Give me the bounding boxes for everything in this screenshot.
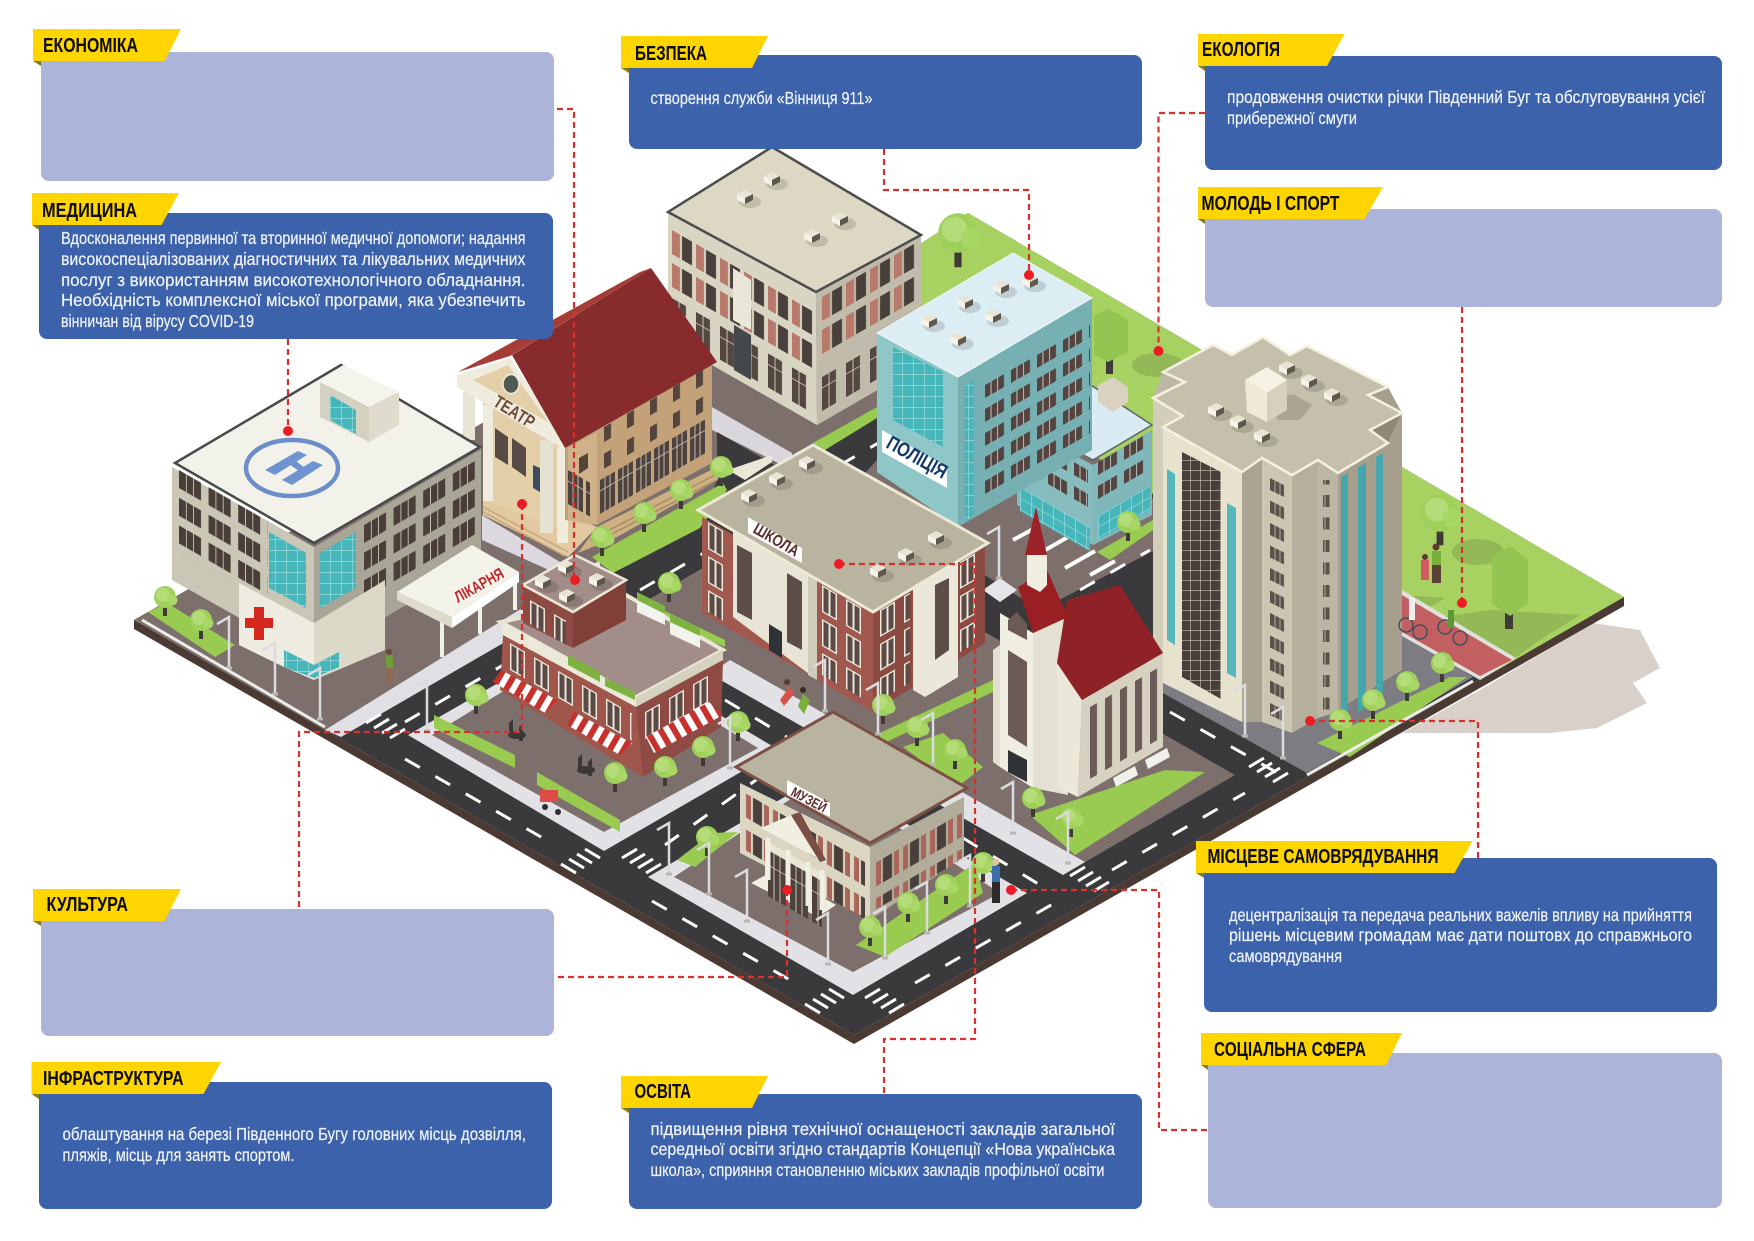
- panel: інфраструктура: [32, 1062, 552, 1209]
- body text: школа», сприяння становленню міських закладів профільної освіти: [650, 1160, 1104, 1180]
- sidewalk along school: [710, 660, 1085, 875]
- sign: hospital: ЛІКАРНЯ: [452, 565, 507, 606]
- sidewalk along hospital block: [325, 560, 600, 737]
- sidewalk under beige office: [712, 407, 792, 470]
- museum plaza: [674, 778, 1000, 972]
- body text: продовження очистки річки Південний Буг та обслуговування усієї: [1227, 87, 1705, 107]
- body text: [1227, 87, 1705, 128]
- trees: [154, 456, 1461, 946]
- block: hospital and theatre plaza: [134, 270, 880, 730]
- icon: large tree behind police: [938, 213, 980, 267]
- panel: соціальна сфера: [1201, 1033, 1722, 1208]
- sign: museum: МУЗЕЙ: [789, 783, 830, 815]
- base edge highlights: [142, 620, 1473, 775]
- heading: ІНФРАСТРУКТУРА: [43, 1068, 184, 1090]
- heading: БЕЗПЕКА: [635, 43, 707, 65]
- panel: місцеве самоврядування: [1196, 841, 1717, 1012]
- side road by theatre: [700, 432, 792, 528]
- building: beige office: [668, 147, 921, 425]
- block: police plaza: [850, 360, 1155, 610]
- base slab thickness: [134, 597, 1624, 1044]
- block: tower plaza: [1150, 560, 1473, 773]
- connector dots: [283, 270, 1467, 895]
- building: school: [698, 445, 988, 712]
- canopy: [397, 545, 519, 657]
- heading: КУЛЬТУРА: [46, 894, 128, 916]
- bicycle lane: [1402, 590, 1516, 680]
- body text: рішень місцевим громадам має дати поштовх до справжнього: [1229, 925, 1692, 945]
- lawns and hedges: [148, 407, 1467, 957]
- body text: облаштування на березі Південного Бугу головних місць дозвілля,: [62, 1124, 526, 1144]
- panel: освіта: [621, 1076, 1142, 1209]
- asphalt ground: [134, 213, 1624, 1035]
- panel: економіка: [33, 29, 554, 181]
- green park ground: [880, 213, 1624, 680]
- body text: створення служби «Вінниця 911»: [650, 88, 873, 108]
- people: [386, 544, 1467, 903]
- body text: Необхідність комплексної міської програми, яка убезпечить: [61, 290, 526, 310]
- sidewalk square near police: [983, 578, 1017, 602]
- building: cafe: [493, 555, 723, 777]
- benches: [1113, 748, 1170, 787]
- sign: school: ШКОЛА: [750, 521, 802, 561]
- body text: самоврядування: [1229, 946, 1342, 966]
- heading: МОЛОДЬ І СПОРТ: [1202, 193, 1340, 215]
- cafe tables: [508, 719, 595, 776]
- panel: культура: [33, 889, 554, 1036]
- body text: послуг з використанням високотехнологічного обладнання.: [61, 270, 526, 290]
- sign: theatre: ТЕАТР: [490, 391, 539, 432]
- cast shadow: [1402, 623, 1660, 733]
- heading: МЕДИЦИНА: [42, 200, 137, 222]
- heading: ЕКОЛОГІЯ: [1202, 39, 1280, 61]
- building: tower: [1153, 337, 1402, 734]
- building: hospital: [172, 365, 519, 680]
- heading: СОЦІАЛЬНА СФЕРА: [1214, 1039, 1366, 1061]
- connector lines: [283, 109, 1478, 1130]
- body text: середньої освіти згідно стандартів Концепції «Нова українська: [650, 1139, 1115, 1159]
- rooftop penthouse: [320, 365, 399, 442]
- icon: red cross: [245, 607, 273, 640]
- building: police annex: [1017, 377, 1152, 551]
- body text: [61, 228, 526, 331]
- body text: [62, 1124, 526, 1165]
- building: police: [877, 253, 1092, 527]
- building: church: [993, 507, 1170, 797]
- city illustration: [134, 147, 1660, 1044]
- body text: [650, 1119, 1115, 1180]
- building: theatre: [457, 268, 718, 575]
- road markings: [366, 442, 1290, 1013]
- sign: police: ПОЛІЦІЯ: [883, 432, 951, 483]
- panel: безпека: [621, 36, 1142, 149]
- block: cafe: [408, 634, 779, 851]
- icon: block tree in park: [1492, 546, 1528, 629]
- body text: пляжів, місць для занять спортом.: [62, 1145, 294, 1165]
- block: museum: [648, 775, 1027, 995]
- heading: ОСВІТА: [634, 1081, 691, 1103]
- icon: helipad H: [246, 440, 338, 496]
- panel: молодь і спорт: [1198, 187, 1722, 307]
- body text: високоспеціалізованих діагностичних та лікувальних медичних: [61, 249, 526, 269]
- panel: екологія: [1198, 34, 1722, 170]
- heading: МІСЦЕВЕ САМОВРЯДУВАННЯ: [1208, 846, 1438, 868]
- panel: медицина: [32, 193, 553, 339]
- block: school and church: [615, 519, 1235, 875]
- heading: ЕКОНОМІКА: [43, 35, 138, 57]
- building: museum: [736, 712, 967, 931]
- cafe plaza: [432, 642, 758, 832]
- body text: вінничан від вірусу COVID-19: [61, 311, 254, 331]
- body text: Вдосконалення первинної та вторинної медичної допомоги; надання: [61, 228, 526, 248]
- awnings: [493, 670, 723, 755]
- body text: прибережної смуги: [1227, 108, 1357, 128]
- street lamps: [217, 527, 1286, 964]
- body text: [1229, 905, 1692, 966]
- hospital annex: [239, 580, 385, 680]
- icon: block tree by police: [1094, 308, 1128, 374]
- body text: підвищення рівня технічної оснащеності закладів загальної: [650, 1119, 1115, 1139]
- park tree shadows: [1132, 353, 1580, 660]
